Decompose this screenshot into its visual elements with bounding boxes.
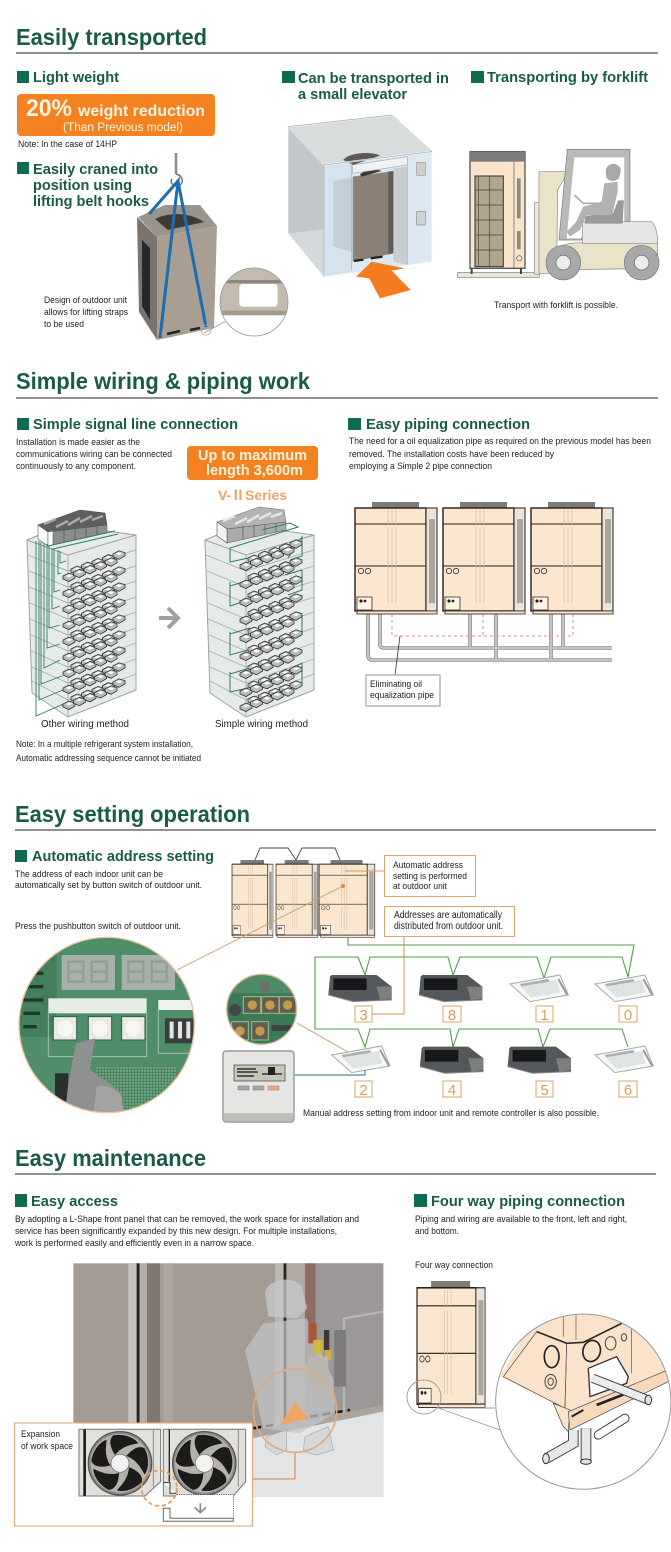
subheading: automatic address: Automatic address setting	[32, 848, 214, 865]
address numbers: 4	[448, 1082, 456, 1099]
leader line: button detail	[177, 884, 345, 970]
address numbers: 8	[448, 1007, 456, 1024]
inset: lifting hole detail	[201, 267, 290, 337]
text: easy access body	[14, 1214, 359, 1249]
caption: four way connection: Four way connection	[415, 1260, 493, 1271]
address numbers: 0	[624, 1007, 632, 1024]
callout: distributed addresses: distributed from outdoor unit.	[394, 921, 503, 932]
heading: simple wiring and piping: Simple wiring & piping work	[16, 368, 310, 394]
subheading: light weight: Light weight	[33, 69, 119, 86]
text: signal line body: continuously to any component.	[16, 461, 136, 472]
text: piping body: removed. The installation costs have been reduced by	[349, 449, 554, 460]
text: automatic address body: automatically set by button switch of outdoor unit.	[15, 880, 202, 891]
text: automatic address body: The address of each indoor unit can be	[15, 869, 163, 880]
text: signal line body: Installation is made easier as the	[16, 437, 140, 448]
diagram: piping connection: Eliminating oil	[370, 679, 422, 690]
label: V-II series: V-ⅡSeries	[218, 487, 287, 503]
text: easy access body: service has been significantly expanded by this new design. For multiple installations,	[15, 1226, 337, 1237]
photo: worker in narrow space	[73, 1263, 383, 1497]
subheading: small elevator: Can be transported in	[298, 70, 449, 87]
callout: maximum length	[187, 446, 318, 480]
callout: 20% weight reduction: 20%	[26, 95, 72, 122]
diagram: other wiring method	[27, 510, 136, 717]
indoor units	[328, 975, 653, 1073]
subheading: easily craned: Easily craned into	[33, 161, 158, 178]
subheading: four way piping: Four way piping connection	[431, 1193, 625, 1210]
illustration: forklift with unit	[458, 149, 659, 280]
heading: easy setting operation: Easy setting operation	[15, 801, 250, 827]
text: automatic address body	[15, 869, 202, 891]
callout: 20% weight reduction: weight reduction	[77, 103, 205, 120]
caption: other wiring: Other wiring method	[41, 719, 129, 730]
subheading: small elevator	[282, 70, 449, 103]
diagram: simple wiring method	[205, 507, 314, 717]
text: four way body: Piping and wiring are available to the front, left and right,	[415, 1214, 627, 1225]
address numbers: 5	[540, 1082, 549, 1099]
text: piping body: employing a Simple 2 pipe connection	[349, 461, 492, 472]
note: addressing	[16, 739, 201, 764]
text: four way body	[415, 1214, 627, 1237]
panel: easy maintenance	[14, 1145, 671, 1526]
callout: performed at outdoor unit: at outdoor unit	[393, 881, 447, 891]
text: outdoor unit design	[44, 295, 128, 330]
text: press pushbutton: Press the pushbutton switch of outdoor unit.	[15, 921, 181, 932]
heading: easy maintenance: Easy maintenance	[15, 1145, 206, 1171]
address numbers: 1	[540, 1007, 549, 1024]
callout: 20% weight reduction: (Than Previous model)	[63, 122, 183, 134]
subheading: small elevator: a small elevator	[298, 86, 407, 103]
text: outdoor unit design: Design of outdoor unit	[44, 295, 127, 306]
panel: easily transported	[16, 24, 659, 340]
text: signal line body	[16, 437, 172, 472]
subheading: easily craned	[17, 161, 158, 210]
photo: circuit board pushbutton	[17, 937, 197, 1113]
callout: 20% weight reduction	[17, 94, 215, 136]
lines: network wiring	[315, 937, 634, 1047]
diagram: piping connection: equalization pipe	[370, 690, 434, 701]
callout: performed at outdoor unit: setting is performed	[393, 871, 467, 881]
address numbers: 3	[359, 1007, 368, 1024]
illustration: four way unit	[417, 1281, 485, 1408]
text: easy access body: By adopting a L-Shape front panel that can be removed, the work space for installation and	[15, 1214, 359, 1225]
illustration: elevator	[288, 115, 432, 298]
text: manual setting: Manual address setting from indoor unit and remote controller is also possible.	[303, 1108, 599, 1119]
photo: indoor unit board	[225, 973, 348, 1052]
inset: expansion of work space	[14, 1423, 252, 1526]
caption: simple wiring: Simple wiring method	[215, 719, 308, 730]
note: addressing: Note: In a multiple refrigerant system installation,	[16, 739, 193, 750]
callout: performed at outdoor unit: Automatic address	[393, 860, 463, 870]
caption: forklift: Transport with forklift is possible.	[494, 300, 618, 311]
note: 14HP: Note: In the case of 14HP	[18, 139, 117, 150]
callout: performed at outdoor unit	[345, 856, 476, 896]
illustration: connection detail circle	[407, 1313, 671, 1489]
panel: easy setting operation	[15, 801, 656, 1122]
subheading: forklift: Transporting by forklift	[487, 69, 648, 86]
inset: expansion of work space: Expansion	[21, 1429, 60, 1440]
subheading: easily craned: lifting belt hooks	[33, 193, 149, 210]
illustration: craned outdoor unit	[137, 153, 217, 340]
address numbers: 2	[359, 1082, 368, 1099]
text: easy access body: work is performed easily and efficiently even in a narrow space.	[14, 1238, 254, 1249]
note: addressing: Automatic addressing sequence cannot be initiated	[16, 753, 201, 764]
text: outdoor unit design: allows for lifting straps	[44, 307, 128, 318]
subheading: easy access: Easy access	[31, 1193, 118, 1210]
callout: maximum length: Up to maximum	[198, 447, 307, 464]
panel: simple wiring and piping	[16, 368, 658, 764]
inset: expansion of work space: of work space	[21, 1441, 73, 1452]
illustration: outdoor units wired	[232, 848, 375, 937]
text: four way body: and bottom.	[415, 1226, 459, 1237]
address numbers: 6	[624, 1082, 632, 1099]
diagram: piping connection	[355, 502, 613, 706]
callout: maximum length: length 3,600m	[206, 462, 303, 479]
illustration: remote controller	[223, 1051, 365, 1122]
arrow: gray	[159, 608, 178, 628]
text: piping body	[349, 436, 651, 472]
text: outdoor unit design: to be used	[44, 319, 84, 330]
heading: easily transported: Easily transported	[16, 24, 207, 50]
subheading: easily craned: position using	[33, 177, 132, 194]
callout: distributed addresses: Addresses are automatically	[394, 910, 502, 921]
address numbers	[355, 1006, 637, 1099]
text: signal line body: communications wiring can be connected	[16, 449, 172, 460]
subheading: easy piping: Easy piping connection	[366, 416, 530, 433]
callout: distributed addresses	[372, 906, 514, 1014]
subheading: signal line: Simple signal line connection	[33, 416, 238, 433]
